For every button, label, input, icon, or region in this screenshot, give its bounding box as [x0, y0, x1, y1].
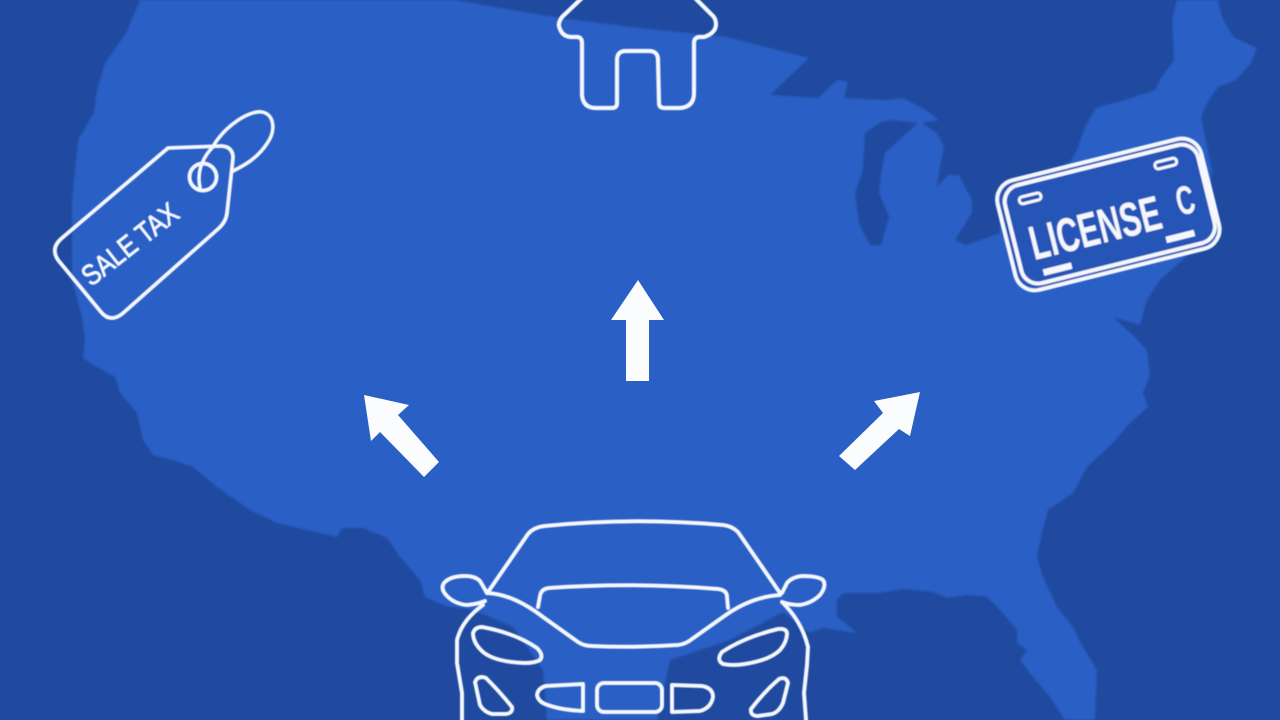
- icon: house: [559, 0, 716, 108]
- center grille: [597, 683, 662, 712]
- hood line: [487, 593, 780, 647]
- arrow: up-left: [364, 395, 439, 477]
- tag eyelet: [190, 164, 216, 190]
- plate bottom-right bar: [1165, 230, 1195, 243]
- left headlight: [473, 627, 541, 663]
- right headlight: [719, 629, 787, 665]
- left mirror: [443, 576, 487, 605]
- icon: sale tax price tag: [55, 112, 273, 318]
- plate top-left slot: [1019, 192, 1042, 204]
- arrow: up-right: [839, 392, 920, 470]
- plate top-right slot: [1154, 158, 1177, 170]
- tag label: SALE TAX: [76, 197, 185, 293]
- plate trailing letter: C: [1171, 177, 1199, 224]
- right fog light: [751, 678, 788, 716]
- tag body: [55, 146, 233, 318]
- icon: license plate: [993, 134, 1224, 295]
- arrow: up: [611, 280, 664, 381]
- car body right side: [783, 603, 808, 720]
- icon: car front view: [443, 521, 824, 720]
- plate inner border: [1001, 141, 1219, 287]
- plate text: LICENSE: [1024, 187, 1167, 271]
- car body left side: [457, 605, 483, 720]
- plate bottom-left bar: [1043, 262, 1072, 276]
- car roof and windshield: [488, 521, 780, 593]
- right mirror: [782, 576, 824, 605]
- left grille: [537, 684, 583, 711]
- left fog light: [475, 677, 512, 714]
- tag string loop: [199, 112, 273, 187]
- lower windshield: [538, 585, 728, 608]
- right grille: [672, 685, 713, 712]
- plate outer border: [993, 134, 1224, 295]
